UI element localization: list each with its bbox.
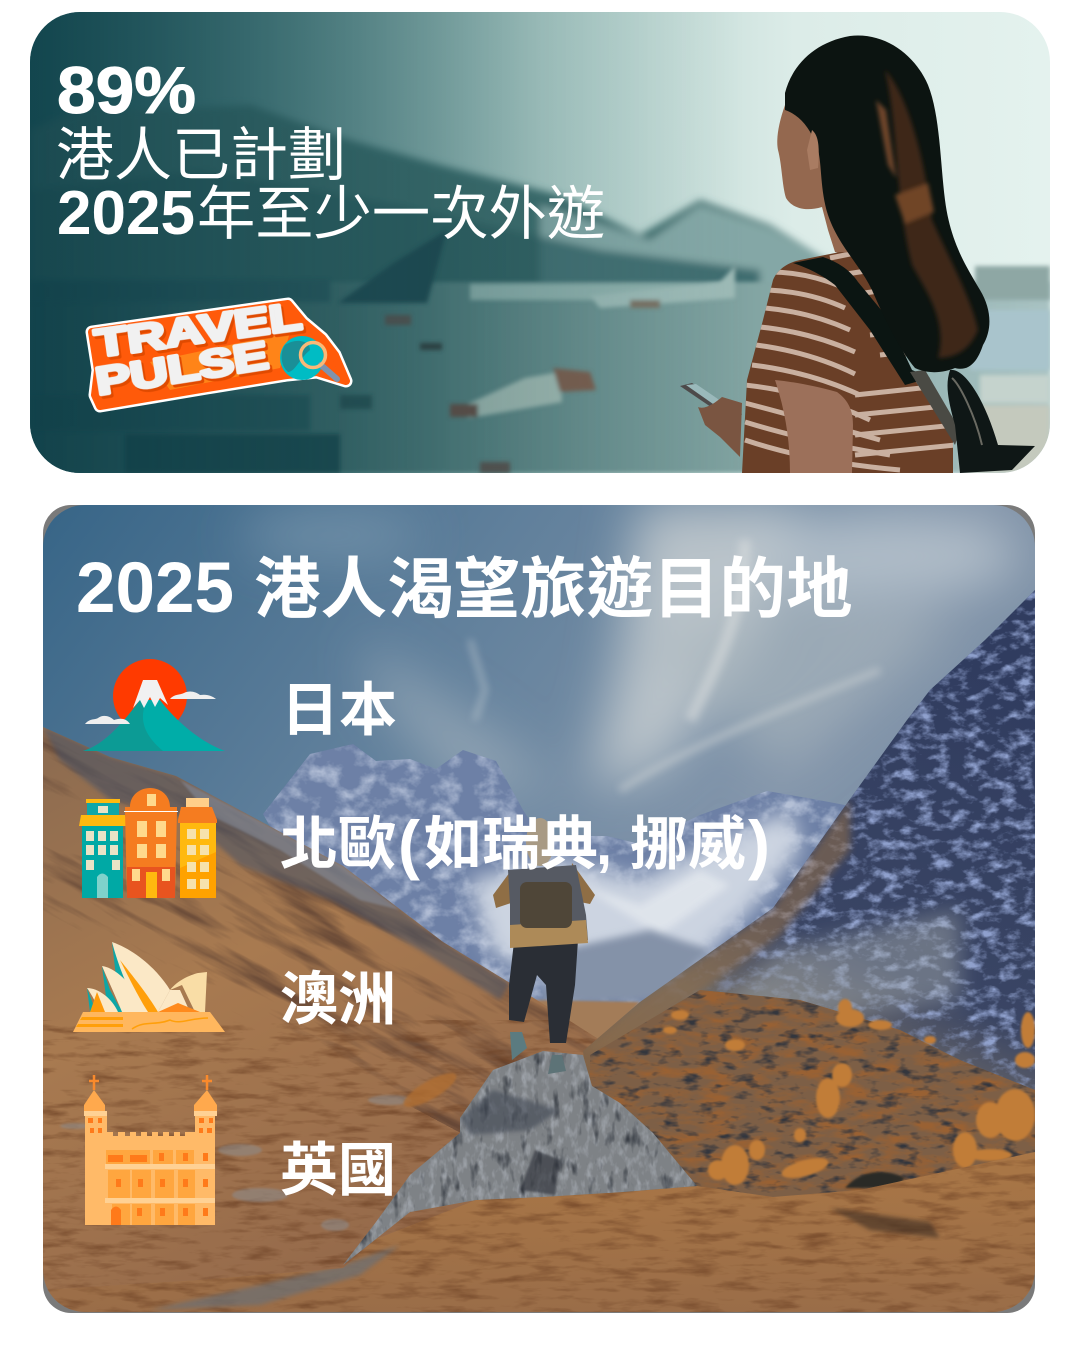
backpack strap (793, 257, 930, 385)
headline: plan line two: 年至少一次外遊 (197, 182, 605, 247)
hiker backpack (520, 882, 572, 928)
hiker left shoe (510, 1032, 527, 1060)
hair highlights (876, 70, 978, 358)
woman looking out with phone (680, 36, 1035, 473)
long hair (785, 36, 989, 372)
label: Nordics: 挪威 (630, 812, 746, 877)
striped t-shirt (740, 250, 960, 473)
clouds (240, 505, 1020, 790)
headline: plan line one: 港人已計劃 (56, 123, 346, 188)
headline: plan line two: 2025 (57, 179, 195, 248)
item: Japan (83, 659, 397, 751)
panel grey backing (43, 505, 1035, 1313)
heading: destinations: 2025 (76, 549, 234, 628)
ear (807, 130, 819, 170)
logo word: TRAVEL: TRAVEL (92, 295, 304, 366)
phone (680, 383, 742, 415)
right rocky slope (570, 585, 1035, 1205)
icon: Mount Fuji and sun (83, 659, 225, 751)
foreground dry ground (43, 1150, 1035, 1312)
summit rock (340, 1045, 700, 1270)
icon: Nordic town houses (79, 788, 217, 898)
label: Japan: 日本 (281, 678, 397, 743)
label: Nordics: 如瑞典 (424, 812, 598, 877)
heading: destinations: 港人渴望旅遊目的地 (254, 553, 852, 627)
mountain hiker background photo (0, 505, 1035, 1320)
hiker legs (509, 940, 578, 1043)
panel: 2025 desired destinations (0, 505, 1035, 1320)
hiker jacket (508, 865, 588, 945)
label: Nordics: 北歐 (280, 812, 396, 877)
label: Nordics: , (596, 812, 612, 877)
valley floor (535, 998, 640, 1038)
arm (775, 380, 853, 473)
distant snowy peaks (260, 740, 860, 1015)
label: UK: 英國 (280, 1138, 396, 1203)
item: Nordics (79, 788, 770, 898)
item: Australia (73, 942, 396, 1032)
logo word: PULSE: PULSE (93, 334, 271, 404)
neck and face (777, 105, 848, 252)
icon: globe with magnifier (280, 336, 337, 380)
left brown slope (43, 727, 597, 1310)
hand (698, 397, 742, 457)
icon: Tower of London (84, 1075, 217, 1225)
label: Nordics: ) (748, 807, 770, 881)
label: Nordics: ( (398, 807, 420, 881)
headline: 89% statistic: 89% (57, 53, 196, 127)
panel: 89% travel plans hero (30, 12, 1050, 473)
hiker hat (526, 818, 554, 866)
hiker (493, 818, 595, 1074)
orange shrubs (663, 999, 1035, 1185)
item: UK (84, 1075, 396, 1225)
label: Australia: 澳洲 (280, 967, 396, 1032)
logo sticker backing (92, 304, 346, 406)
hiker right arm (570, 863, 595, 904)
hiker right shoe (548, 1055, 566, 1074)
logo sticker outline (92, 304, 346, 406)
hiker left arm (493, 874, 510, 908)
icon: Sydney Opera House (73, 942, 225, 1032)
backpack (948, 370, 1035, 473)
rust and gravel hillside (590, 985, 1035, 1200)
logo: Travel Pulse (92, 295, 346, 406)
airport background photo (30, 12, 1050, 473)
